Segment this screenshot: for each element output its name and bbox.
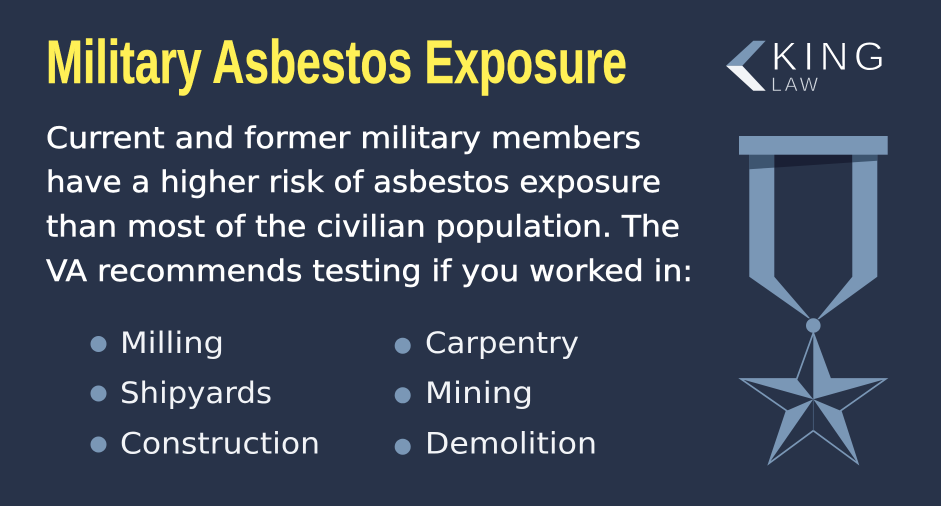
- title: Military Asbestos Exposure: [46, 28, 627, 96]
- medal star: [741, 333, 886, 463]
- list: occupations left column: Milling: [120, 326, 224, 360]
- text block: intro: than most of the civilian population. The: [46, 210, 680, 244]
- icon: medal: [739, 136, 888, 463]
- list: occupations left column: Construction: [120, 426, 320, 460]
- list: occupations right column: Mining: [425, 376, 533, 410]
- text block: intro: [46, 121, 693, 288]
- list: occupations right column: Demolition: [425, 426, 597, 460]
- logo: King Law: LAW: [771, 74, 819, 96]
- logo: King Law: KING: [771, 35, 885, 79]
- text block: intro: VA recommends testing if you worked in:: [46, 254, 693, 288]
- medal ribbon: [739, 136, 888, 333]
- logo: King Law: [726, 35, 885, 96]
- list: occupations right column: Carpentry: [425, 326, 579, 360]
- list: occupations left column: Shipyards: [120, 376, 272, 410]
- text block: intro: Current and former military members: [46, 121, 641, 155]
- list: occupations right column: [395, 326, 597, 460]
- text block: intro: have a higher risk of asbestos exposure: [46, 165, 661, 199]
- list: occupations left column: [90, 326, 320, 460]
